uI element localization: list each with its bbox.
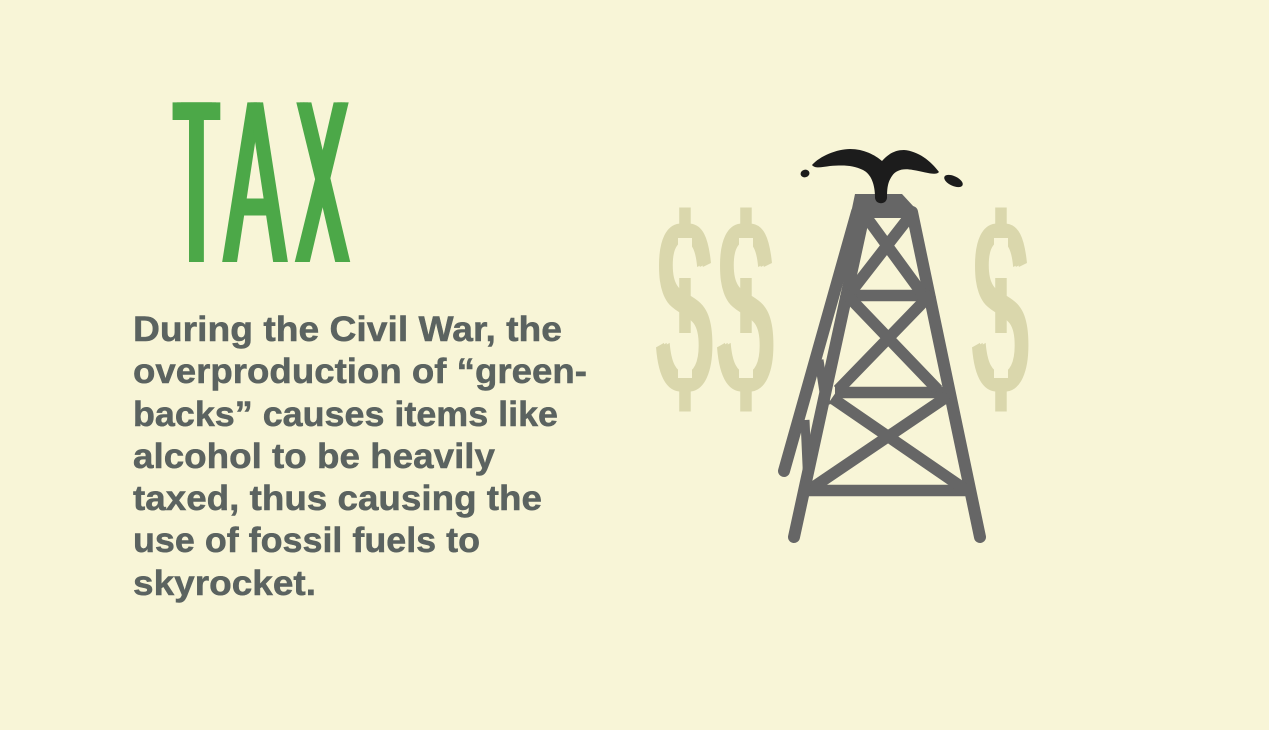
platform	[850, 194, 918, 218]
text block: description: taxed, thus causing the	[133, 479, 542, 518]
oil drops	[800, 169, 810, 178]
dollar signs: $	[716, 167, 769, 448]
icon: oil derrick	[784, 194, 980, 537]
title: TAX: T	[171, 53, 214, 312]
text block: description: use of fossil fuels to	[133, 521, 480, 560]
horizontal bars	[805, 296, 972, 490]
text block: description	[133, 310, 587, 603]
text block: description: overproduction of “green-	[133, 352, 587, 391]
text block: description: alcohol to be heavily	[133, 437, 496, 476]
icon: oil gusher	[800, 149, 965, 203]
dollar signs: $	[655, 167, 708, 448]
text block: description: During the Civil War, the	[133, 310, 562, 349]
text block: description: backs” causes items like	[133, 395, 558, 434]
text block: description: skyrocket.	[133, 564, 316, 603]
dollar signs: $	[971, 167, 1024, 448]
side braces	[805, 360, 826, 487]
legs	[794, 210, 865, 537]
cross braces	[812, 396, 966, 490]
dollar signs	[655, 167, 1028, 448]
title: TAX: X	[293, 53, 345, 312]
title: TAX	[171, 53, 350, 312]
title: TAX: A	[222, 53, 282, 312]
